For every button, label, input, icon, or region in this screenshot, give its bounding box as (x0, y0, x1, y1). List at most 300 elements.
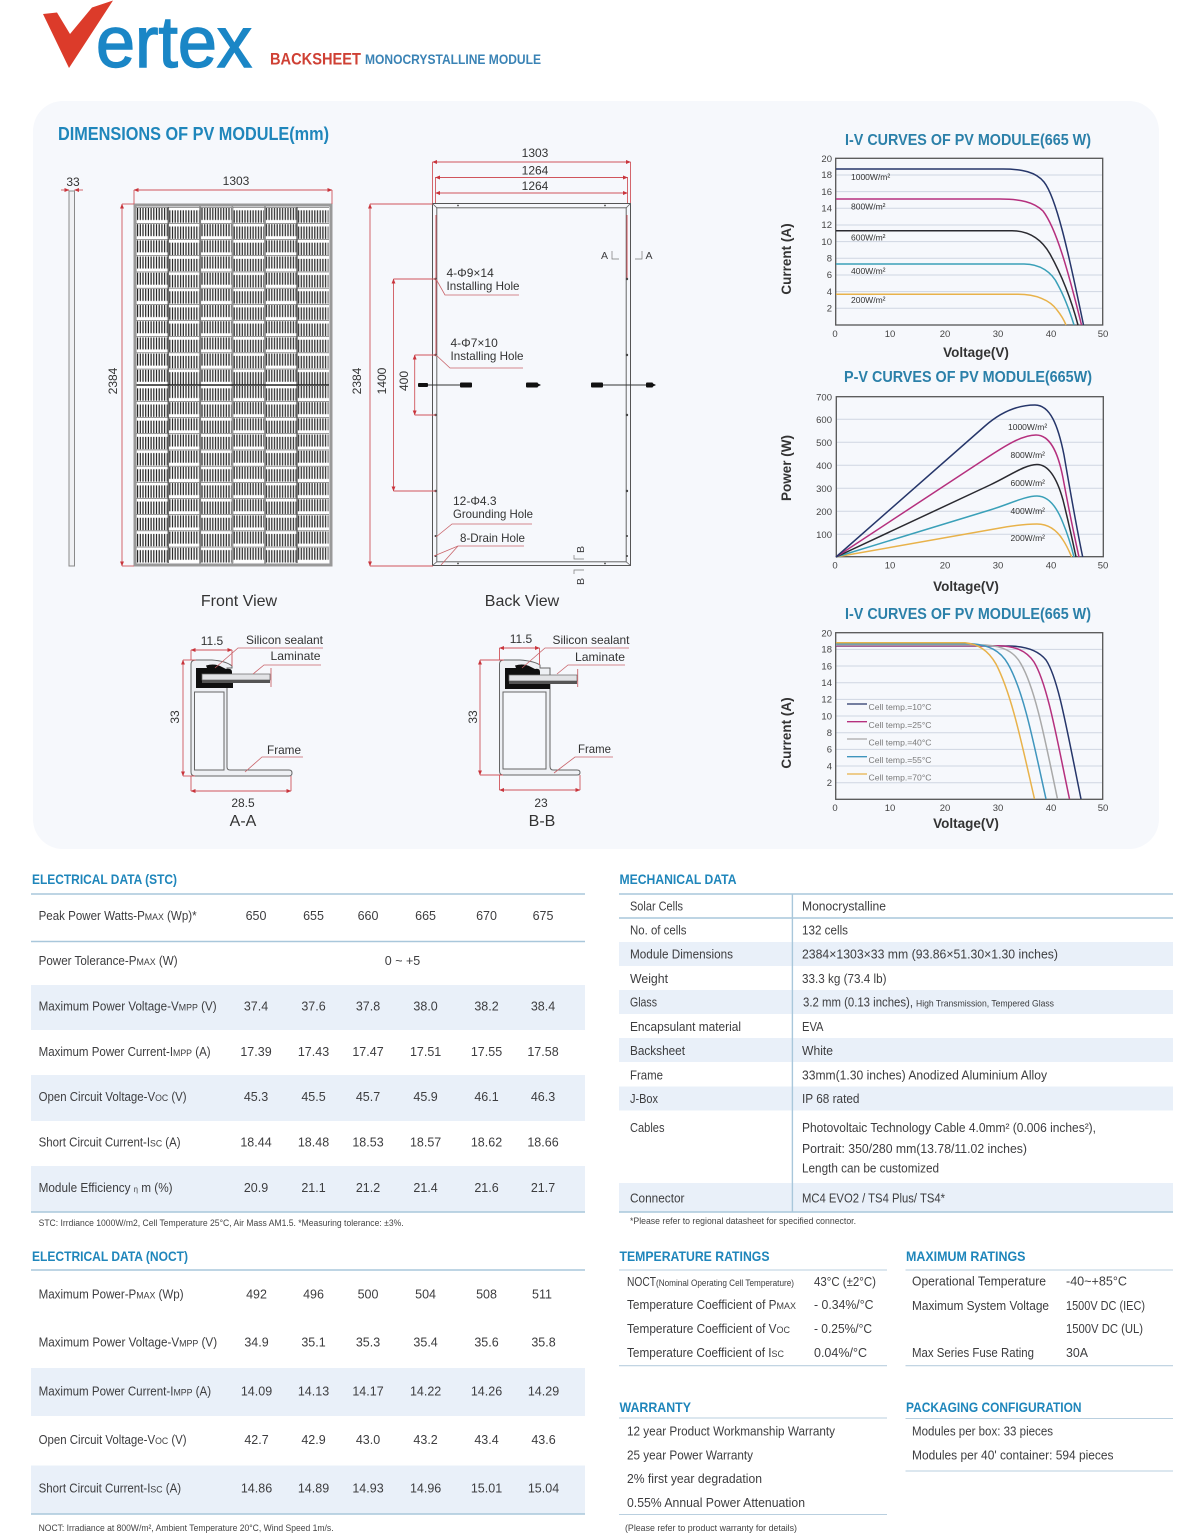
row: module dimensions (630, 948, 1058, 962)
irradiance labels (851, 172, 890, 305)
row: power tolerance: 0 ~ +5 (385, 954, 420, 968)
callout: silicon sealant (522, 633, 630, 668)
row: peak power: Peak Power Watts-PMAX (Wp)* (39, 909, 197, 923)
dimension: 33: 33 (466, 710, 480, 724)
callout: grounding hole: Grounding Hole (453, 507, 533, 521)
y axis labels: 6 (827, 270, 832, 281)
legend: cell temperature: Cell temp.=10°C (868, 702, 932, 712)
row: Impp: Maximum Power Current-IMPP (A) (39, 1045, 211, 1059)
row: Impp: 14.17 (352, 1384, 384, 1398)
row: module dimensions: Module Dimensions (630, 948, 733, 962)
curves (836, 169, 1084, 325)
row: Vmpp (39, 1336, 556, 1350)
back view width dimensions: 1303 (522, 146, 549, 160)
x axis labels: 40 (1046, 560, 1056, 572)
row: Isc: 18.57 (410, 1136, 441, 1150)
row: Isc: 14.93 (352, 1482, 384, 1496)
row: connector (630, 1192, 945, 1206)
row: Vmpp: 35.4 (413, 1336, 438, 1350)
row: encapsulant: EVA (802, 1020, 824, 1034)
callout: 9x14 installing hole: Installing Hole (446, 279, 520, 293)
dimension: 33: 33 (168, 710, 182, 724)
x axis labels: 0 (832, 803, 838, 814)
row: peak power: 665 (415, 909, 436, 923)
row: Vmpp: Maximum Power Voltage-VMPP (V) (39, 1000, 217, 1014)
row: glass: 3.2 mm (0.13 inches), (803, 996, 913, 1010)
dimension: 11.5 (191, 634, 232, 666)
footnote: NOCT: Irradiance at 800W/m², Ambient Temperature 20°C, Wind Speed 1m/s. (39, 1523, 334, 1534)
dimension: 33 (466, 660, 504, 775)
row: j-box (630, 1092, 860, 1106)
row: frame (630, 1068, 1048, 1082)
y axis labels: 18 (821, 170, 832, 181)
row: Isc (39, 1136, 559, 1150)
row: max series fuse rating: 30A (1066, 1346, 1089, 1360)
callout: 9x14 installing hole: 4-Φ9×14 (446, 266, 494, 280)
row: Voc: 43.2 (413, 1433, 438, 1447)
row: efficiency: 21.7 (531, 1181, 555, 1195)
row: Impp: 14.13 (298, 1384, 329, 1398)
row: Isc: 18.48 (298, 1136, 329, 1150)
y axis labels: 8 (827, 728, 832, 739)
row: Pmax: 500 (358, 1288, 378, 1302)
x axis labels: 50 (1098, 560, 1108, 572)
callout: 7x10 installing hole (436, 336, 524, 368)
row: Impp: 17.47 (352, 1045, 384, 1059)
table: maximum ratings (906, 1248, 1173, 1366)
callout: laminate: Laminate (575, 650, 625, 664)
row: cables (630, 1121, 1096, 1176)
row: Isc: 15.01 (471, 1482, 502, 1496)
callout: frame (245, 743, 303, 772)
heading: MAXIMUM RATINGS (906, 1248, 1026, 1264)
irradiance labels: 1000W/m² (1008, 422, 1047, 432)
axis title: voltage: Voltage(V) (933, 579, 999, 594)
dimension: 28.5 (191, 776, 291, 810)
y axis labels (821, 154, 832, 314)
row: maximum system voltage: 1500V DC (UL) (1066, 1322, 1143, 1336)
y axis labels: 10 (821, 237, 832, 248)
dimension: 11.5: 11.5 (510, 632, 533, 646)
irradiance labels: 200W/m² (851, 295, 886, 305)
packaging items: Modules per 40' container: 594 pieces (912, 1448, 1114, 1462)
section marker A: A (601, 250, 608, 262)
side view of module: 33 (66, 175, 80, 189)
row: weight: 33.3 kg (73.4 lb) (802, 972, 886, 986)
y axis labels: 12 (821, 694, 832, 706)
row: weight (630, 972, 886, 986)
callout: 9x14 installing hole (436, 266, 520, 295)
row: Impp: 17.43 (298, 1045, 329, 1059)
row: max series fuse rating: Max Series Fuse Rating (912, 1346, 1034, 1360)
dimension: 33 (168, 660, 196, 776)
row: power tolerance (39, 954, 420, 968)
row: backsheet (630, 1044, 833, 1058)
y axis labels: 700 (816, 392, 832, 404)
row: Isc: Short Circuit Current-ISC (A) (39, 1482, 181, 1496)
irradiance labels: 200W/m² (1010, 533, 1045, 543)
row: NOCT (627, 1275, 876, 1289)
row: NOCT: (Nominal Operating Cell Temperature) (656, 1278, 794, 1288)
row: Vmpp: 34.9 (244, 1336, 269, 1350)
callout: drain hole (434, 531, 525, 565)
footnote: STC: Irrdiance 1000W/m2, Cell Temperature 25°C, Air Mass AM1.5. *Measuring tolerance: ±3%. (39, 1218, 404, 1229)
row: Impp: 14.26 (471, 1384, 502, 1398)
axis title: current: Current (A) (779, 697, 794, 769)
x axis labels: 0 (832, 560, 838, 572)
y axis labels: 6 (827, 744, 832, 756)
axis title: power: Power (W) (779, 435, 794, 501)
row: Impp: 17.51 (410, 1045, 441, 1059)
x axis labels: 10 (885, 329, 895, 340)
row: peak power: 675 (533, 909, 553, 923)
row: coefficient Pmax: Temperature Coefficient of PMAX (627, 1298, 797, 1312)
y axis labels: 300 (816, 484, 832, 495)
x axis labels (832, 803, 1108, 814)
block: packaging configuration (906, 1399, 1173, 1471)
row: Isc: 18.53 (352, 1136, 384, 1150)
back view height dimensions (350, 204, 436, 566)
chart: I-V curves by irradiance (779, 132, 1108, 360)
y axis labels: 20 (821, 154, 832, 165)
product title: monocrystalline module: MONOCRYSTALLINE MODULE (365, 51, 541, 67)
row: coefficient Isc (627, 1346, 867, 1360)
logo: red V mark (43, 0, 113, 68)
row: Vmpp: 37.8 (356, 1000, 380, 1014)
back view height dimensions: 1400 (375, 367, 389, 394)
callout: 7x10 installing hole: 4-Φ7×10 (450, 336, 498, 350)
curves (836, 405, 1083, 557)
x axis labels: 40 (1046, 329, 1056, 340)
irradiance labels: 800W/m² (851, 202, 886, 212)
back view drawing (350, 146, 656, 585)
row: Impp (39, 1384, 559, 1398)
x axis labels: 20 (940, 560, 950, 572)
row: cables: Length can be customized (802, 1162, 939, 1176)
row: Pmax: 496 (303, 1288, 324, 1302)
row: number of cells: 132 cells (802, 924, 848, 938)
row: Vmpp: 37.6 (301, 1000, 326, 1014)
row: Voc: Open Circuit Voltage-VOC (V) (39, 1433, 187, 1447)
callout: laminate (557, 650, 625, 674)
legend: cell temperature: Cell temp.=25°C (868, 720, 932, 730)
table: temperature ratings (619, 1248, 887, 1366)
row: solar cells: Solar Cells (630, 900, 683, 914)
block: warranty (619, 1399, 887, 1534)
x axis labels: 30 (993, 560, 1003, 572)
row: efficiency (39, 1181, 555, 1195)
row: Impp: 14.29 (528, 1384, 559, 1398)
heading: dimensions of PV module: DIMENSIONS OF PV MODULE(mm) (58, 124, 329, 144)
irradiance labels: 400W/m² (1010, 506, 1045, 516)
y axis labels: 600 (816, 415, 832, 426)
row: number of cells: No. of cells (630, 924, 686, 938)
dimension: 23 (500, 775, 580, 810)
heading: WARRANTY (620, 1399, 692, 1415)
row: Pmax: 508 (476, 1288, 497, 1302)
row: Voc: 43.6 (531, 1433, 556, 1447)
back view width dimensions: 1264 (522, 164, 549, 178)
x axis labels: 40 (1046, 803, 1056, 814)
row: Pmax: 511 (532, 1288, 552, 1302)
row: coefficient Voc (627, 1322, 872, 1336)
row: coefficient Isc: Temperature Coefficient of ISC (627, 1346, 784, 1360)
row: Voc (39, 1433, 556, 1447)
row: connector: MC4 EVO2 / TS4 Plus/ TS4* (802, 1192, 945, 1206)
dimension: 11.5 (500, 632, 540, 665)
dimension: 11.5: 11.5 (201, 634, 224, 648)
footnote: (Please refer to product warranty for details) (625, 1523, 797, 1534)
row: solar cells: Monocrystalline (802, 900, 886, 914)
y axis labels: 16 (821, 662, 832, 672)
y axis labels: 4 (827, 762, 832, 772)
row: Vmpp: 35.6 (474, 1336, 499, 1350)
row: Voc (39, 1090, 555, 1104)
chart title: P-V CURVES OF PV MODULE(665W) (844, 369, 1092, 386)
row: Isc: 18.44 (240, 1136, 272, 1150)
logo: ertex wordmark: ertex (96, 3, 252, 83)
back view width dimensions: 1264 (522, 179, 549, 193)
row: efficiency: 20.9 (244, 1181, 268, 1195)
curves (836, 643, 1081, 799)
callout: silicon sealant (215, 633, 324, 668)
row: solar cells (630, 900, 886, 914)
section drawing A-A (168, 633, 324, 810)
chart: I-V curves by cell temperature (779, 606, 1108, 831)
row: Impp: 14.09 (241, 1384, 272, 1398)
row: Impp: Maximum Power Current-IMPP (A) (39, 1384, 211, 1398)
row: Voc: Open Circuit Voltage-VOC (V) (39, 1090, 187, 1104)
row: backsheet: White (802, 1044, 833, 1058)
y axis labels: 8 (827, 254, 832, 264)
row: j-box: IP 68 rated (802, 1092, 860, 1106)
callout: frame: Frame (267, 743, 301, 757)
row: cables: Portrait: 350/280 mm(13.78/11.02 inches) (802, 1142, 1027, 1156)
y axis labels: 12 (821, 220, 832, 231)
row: Vmpp: 38.2 (474, 1000, 499, 1014)
irradiance labels (1008, 422, 1047, 543)
row: Vmpp: 38.0 (413, 1000, 438, 1014)
row: glass: High Transmission, Tempered Glass (916, 998, 1054, 1008)
row: Isc: 18.66 (527, 1136, 559, 1150)
row: efficiency: 21.2 (356, 1181, 380, 1195)
x axis labels: 0 (832, 329, 838, 340)
row: Voc: 45.7 (356, 1090, 380, 1104)
panel: dimensions and curves (33, 101, 1159, 849)
row: coefficient Voc: - 0.25%/°C (814, 1322, 872, 1336)
legend: cell temperature: Cell temp.=40°C (868, 738, 932, 748)
legend: cell temperature (847, 702, 932, 782)
front view height dimension: 2384 (106, 367, 120, 394)
row: Isc: 15.04 (528, 1482, 559, 1496)
row: Isc (39, 1482, 559, 1496)
section marker B: B (575, 546, 587, 553)
section marker A: A (646, 250, 653, 262)
chart title: I-V CURVES OF PV MODULE(665 W) (845, 606, 1091, 623)
axis title: voltage: Voltage(V) (943, 345, 1009, 360)
row: efficiency: 21.4 (413, 1181, 438, 1195)
footnote: *Please refer to regional datasheet for specified connector. (630, 1216, 856, 1227)
y axis labels: 14 (821, 678, 832, 689)
row: operational temperature: -40~+85°C (1066, 1274, 1127, 1288)
x axis labels: 50 (1098, 803, 1108, 814)
row: Voc: 42.9 (301, 1433, 326, 1447)
mounting hole marks (434, 205, 628, 564)
x axis labels: 10 (885, 560, 895, 572)
row: maximum system voltage: 1500V DC (IEC) (1066, 1299, 1145, 1313)
callout: frame (554, 742, 613, 773)
row: weight: Weight (630, 972, 669, 986)
y axis labels: 14 (821, 204, 832, 214)
row: coefficient Isc: 0.04%/°C (814, 1346, 867, 1360)
row: Voc: 46.1 (474, 1090, 499, 1104)
row: operational temperature (912, 1274, 1127, 1288)
dimension: 28.5: 28.5 (231, 796, 255, 810)
x axis labels: 50 (1098, 329, 1108, 340)
row: Vmpp (39, 1000, 555, 1014)
heading: MECHANICAL DATA (620, 871, 736, 887)
row: Impp: 14.22 (410, 1384, 441, 1398)
row: Vmpp: 35.1 (301, 1336, 326, 1350)
row: Pmax: 504 (415, 1288, 436, 1302)
row: operational temperature: Operational Temperature (912, 1274, 1046, 1288)
row: Voc: 46.3 (531, 1090, 555, 1104)
axis title: voltage: Voltage(V) (933, 816, 999, 831)
x axis labels (832, 329, 1108, 340)
heading: PACKAGING CONFIGURATION (906, 1399, 1082, 1415)
y axis labels: 18 (821, 644, 832, 656)
legend: cell temperature: Cell temp.=55°C (868, 755, 932, 765)
packaging items: Modules per box: 33 pieces (912, 1424, 1053, 1438)
row: Isc: 14.86 (241, 1482, 272, 1496)
row: peak power: 670 (476, 909, 497, 923)
row: efficiency: 21.1 (301, 1181, 326, 1195)
row: Impp: 17.55 (471, 1045, 502, 1059)
y axis labels: 20 (821, 628, 832, 640)
product title: backsheet: BACKSHEET (270, 50, 362, 68)
y axis labels: 4 (827, 287, 832, 298)
row: frame: Frame (630, 1068, 663, 1082)
row: Voc: 43.0 (356, 1433, 380, 1447)
y axis labels: 10 (821, 712, 832, 722)
row: glass (630, 996, 1054, 1010)
legend: cell temperature: Cell temp.=70°C (868, 772, 932, 782)
row: Pmax: Maximum Power-PMAX (Wp) (39, 1288, 184, 1302)
y axis labels: 500 (816, 438, 832, 449)
row: peak power (39, 909, 553, 923)
table: electrical data STC (31, 871, 585, 1229)
row: coefficient Pmax (627, 1298, 874, 1312)
row: backsheet: Backsheet (630, 1044, 685, 1058)
callout: silicon sealant: Silicon sealant (552, 633, 630, 647)
side view of module (61, 175, 83, 566)
y axis labels: 16 (821, 187, 832, 198)
warranty items: 12 year Product Workmanship Warranty (627, 1424, 836, 1438)
row: Isc: Short Circuit Current-ISC (A) (39, 1136, 181, 1150)
y axis labels (816, 392, 832, 541)
row: Pmax: 492 (246, 1288, 267, 1302)
callout: grounding hole (436, 494, 533, 537)
row: Impp (39, 1045, 559, 1059)
section drawing B-B (466, 632, 630, 810)
y axis labels: 400 (816, 461, 832, 472)
row: encapsulant: Encapsulant material (630, 1020, 741, 1034)
heading: ELECTRICAL DATA (STC) (32, 871, 177, 887)
row: Impp: 17.58 (527, 1045, 559, 1059)
row: glass: Glass (630, 996, 657, 1010)
cable and connectors (418, 382, 656, 388)
front view drawing (106, 174, 332, 566)
warranty items (627, 1424, 836, 1510)
warranty items: 0.55% Annual Power Attenuation (627, 1496, 805, 1510)
row: Voc: 43.4 (474, 1433, 499, 1447)
chart title: I-V CURVES OF PV MODULE(665 W) (845, 132, 1091, 149)
row: NOCT: NOCT (627, 1275, 656, 1289)
label: A-A: A-A (230, 813, 257, 830)
callout: laminate: Laminate (270, 649, 321, 663)
row: maximum system voltage: Maximum System Voltage (912, 1299, 1049, 1313)
heading: TEMPERATURE RATINGS (620, 1248, 770, 1264)
row: Voc: 42.7 (244, 1433, 269, 1447)
callout: drain hole: 8-Drain Hole (460, 531, 525, 545)
row: Pmax (39, 1288, 552, 1302)
packaging items (912, 1424, 1114, 1462)
x axis labels: 20 (940, 329, 950, 340)
row: Voc: 45.9 (413, 1090, 438, 1104)
callout: grounding hole: 12-Φ4.3 (453, 494, 497, 508)
dimension: 23: 23 (534, 796, 548, 810)
row: cables: Photovoltaic Technology Cable 4.0mm² (0.006 inches²), (802, 1121, 1096, 1135)
row: coefficient Pmax: - 0.34%/°C (814, 1298, 874, 1312)
row: Vmpp: 35.8 (531, 1336, 556, 1350)
y axis labels (821, 628, 832, 789)
row: frame: 33mm(1.30 inches) Anodized Aluminium Alloy (802, 1068, 1048, 1082)
callout: silicon sealant: Silicon sealant (246, 633, 324, 647)
front view width dimension: 1303 (223, 174, 250, 188)
row: Vmpp: Maximum Power Voltage-VMPP (V) (39, 1336, 217, 1350)
y axis labels: 2 (827, 778, 832, 789)
y axis labels: 2 (827, 304, 832, 314)
row: Isc: 14.96 (410, 1482, 441, 1496)
row: module dimensions: 2384×1303×33 mm (93.86×51.30×1.30 inches) (802, 948, 1058, 962)
row: peak power: 660 (358, 909, 378, 923)
x axis labels: 10 (885, 803, 895, 814)
row: encapsulant (630, 1020, 824, 1034)
x axis labels: 30 (993, 803, 1003, 814)
row: efficiency: Module Efficiency η m (%) (39, 1181, 173, 1195)
header: logo and product title (43, 0, 541, 83)
row: Vmpp: 37.4 (244, 1000, 268, 1014)
x axis labels (832, 560, 1108, 572)
callout: 7x10 installing hole: Installing Hole (450, 349, 524, 363)
chart: P-V curves by irradiance (779, 369, 1108, 594)
warranty items: 25 year Power Warranty (627, 1448, 754, 1462)
irradiance labels: 600W/m² (851, 232, 886, 242)
y axis labels: 200 (816, 507, 832, 518)
row: connector: Connector (630, 1192, 684, 1206)
row: number of cells (630, 924, 848, 938)
section marker B (574, 546, 587, 585)
irradiance labels: 800W/m² (1010, 450, 1045, 460)
irradiance labels: 600W/m² (1010, 478, 1045, 488)
row: Voc: 45.5 (301, 1090, 326, 1104)
back view width dimensions (432, 146, 630, 203)
row: NOCT: 43°C (±2°C) (814, 1275, 876, 1289)
row: peak power: 655 (303, 909, 324, 923)
y axis labels: 100 (816, 530, 832, 541)
row: Isc: 18.62 (471, 1136, 502, 1150)
irradiance labels: 1000W/m² (851, 172, 890, 182)
